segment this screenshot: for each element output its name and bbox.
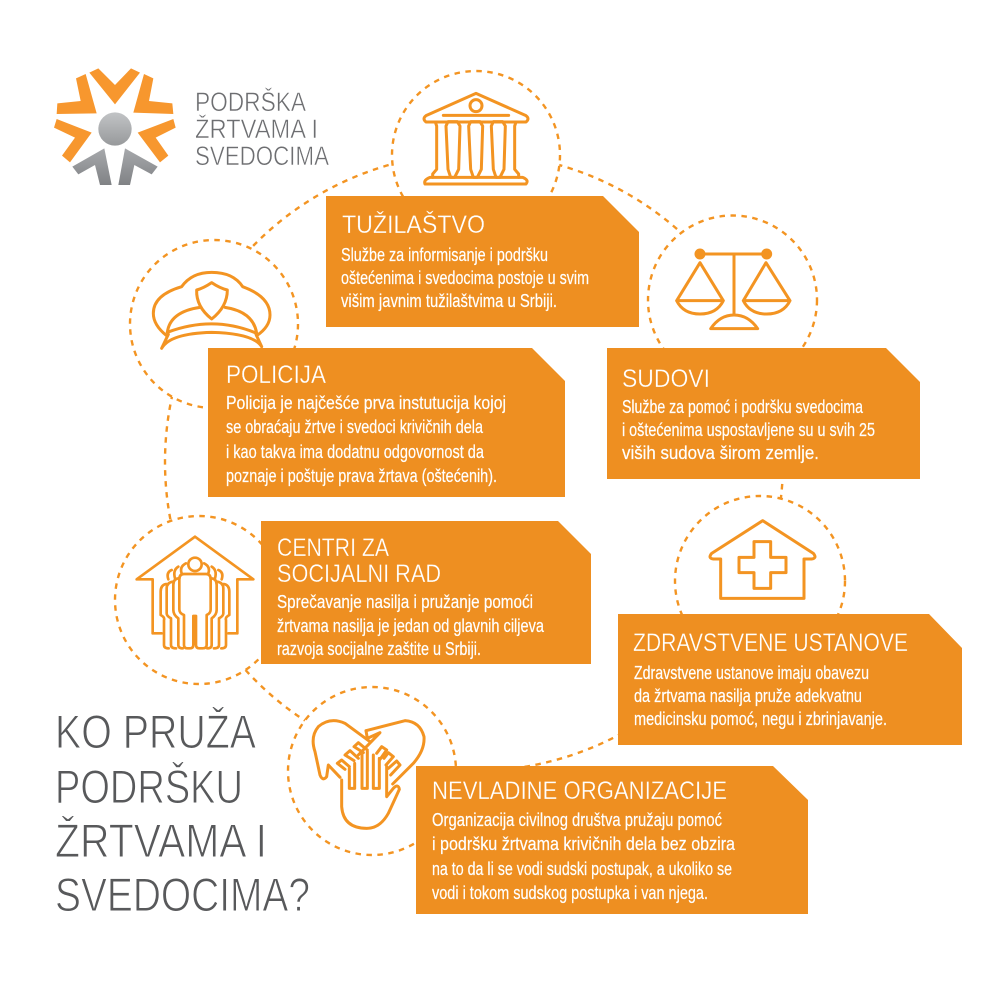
text: nevladine organizacije description <box>432 810 736 903</box>
heading: centri za socijalni rad: CENTRI ZA <box>277 534 389 562</box>
icon: courthouse <box>424 93 528 184</box>
text: policija description: se obraćaju žrtve i svedoci krivičnih dela <box>226 417 484 437</box>
logo mark <box>54 68 176 185</box>
title: PODRŠKU <box>55 760 243 813</box>
logo wordmark: PODRŠKA <box>195 86 306 117</box>
icon: hospital house <box>710 521 815 598</box>
text: zdravstvene description <box>634 663 887 729</box>
dashed circle: zdravstvene ustanove <box>675 496 845 666</box>
text: sudovi description <box>622 397 875 463</box>
text: zdravstvene description: Zdravstvene ustanove imaju obavezu <box>634 663 869 683</box>
text: nevladine organizacije description: vodi i tokom sudskog postupka i van njega. <box>432 883 708 903</box>
heading: centri za socijalni rad <box>277 534 441 588</box>
text: zdravstvene description: medicinsku pomoć, negu i zbrinjavanje. <box>634 709 887 729</box>
panel: centri za socijalni rad <box>261 521 591 664</box>
title <box>55 705 310 921</box>
dashed circle: policija <box>130 240 298 408</box>
heading: centri za socijalni rad: SOCIJALNI RAD <box>277 560 441 588</box>
text: policija description: poznaje i poštuje prava žrtava (oštećenih). <box>226 466 497 486</box>
text: zdravstvene description: da žrtvama nasilja pruže adekvatnu <box>634 686 862 706</box>
logo wordmark: SVEDOCIMA <box>195 141 329 171</box>
title: ŽRTVAMA I <box>55 814 267 867</box>
text: policija description: i kao takva ima dodatnu odgovornost da <box>226 442 485 462</box>
dashed circle: sudovi <box>648 216 817 384</box>
text: centri description: razvoja socijalne zaštite u Srbiji. <box>277 639 481 659</box>
dashed connecting ring <box>165 153 783 771</box>
icon: joined hands <box>313 721 424 828</box>
text: sudovi description: Službe za pomoć i podršku svedocima <box>622 397 864 417</box>
heading: tužilaštvo: TUŽILAŠTVO <box>342 210 485 239</box>
text: tužilaštvo description: Službe za informisanje i podršku <box>341 245 548 265</box>
text: tužilaštvo description: oštećenima i svedocima postoje u svim <box>341 268 589 288</box>
panel: tužilaštvo <box>326 196 639 327</box>
heading: nevladine organizacije: NEVLADINE ORGANIZACIJE <box>432 777 727 805</box>
logo wordmark <box>195 86 329 171</box>
title: KO PRUŽA <box>55 705 257 758</box>
panel: zdravstvene ustanove <box>618 614 962 745</box>
text: sudovi description: viših sudova širom zemlje. <box>622 443 819 463</box>
text: nevladine organizacije description: i podršku žrtvama krivičnih dela bez obzira <box>432 834 736 854</box>
icon: house with people <box>137 537 253 648</box>
dashed circle: nevladine organizacije <box>288 687 456 855</box>
heading: sudovi: SUDOVI <box>622 365 710 393</box>
heading: policija: POLICIJA <box>226 361 326 389</box>
text: policija description <box>226 393 506 486</box>
text: centri description: žrtvama nasilja je jedan od glavnih ciljeva <box>277 616 545 636</box>
text: centri description <box>277 592 545 659</box>
title: SVEDOCIMA? <box>55 868 310 921</box>
text: tužilaštvo description <box>341 245 589 311</box>
panel: sudovi <box>607 348 920 479</box>
heading: zdravstvene ustanove: ZDRAVSTVENE USTANOVE <box>633 629 908 657</box>
text: tužilaštvo description: višim javnim tužilaštvima u Srbiji. <box>341 291 557 311</box>
panel: policija <box>208 348 565 497</box>
dashed circle: tužilaštvo <box>392 71 560 239</box>
icon: scales <box>677 250 790 329</box>
text: nevladine organizacije description: Organizacija civilnog društva pružaju pomoć <box>432 810 722 830</box>
icon: police cap <box>153 272 270 348</box>
text: nevladine organizacije description: na to da li se vodi sudski postupak, a ukoliko se <box>432 859 732 879</box>
text: policija description: Policija je najčešće prva instutucija kojoj <box>226 393 506 413</box>
logo wordmark: ŽRTVAMA I <box>195 113 318 144</box>
text: sudovi description: i oštećenima uspostavljene su u svih 25 <box>622 420 875 440</box>
panel: nevladine organizacije <box>416 766 808 914</box>
text: centri description: Sprečavanje nasilja i pružanje pomoći <box>277 592 533 612</box>
dashed circle: centri za socijalni rad <box>115 516 283 684</box>
